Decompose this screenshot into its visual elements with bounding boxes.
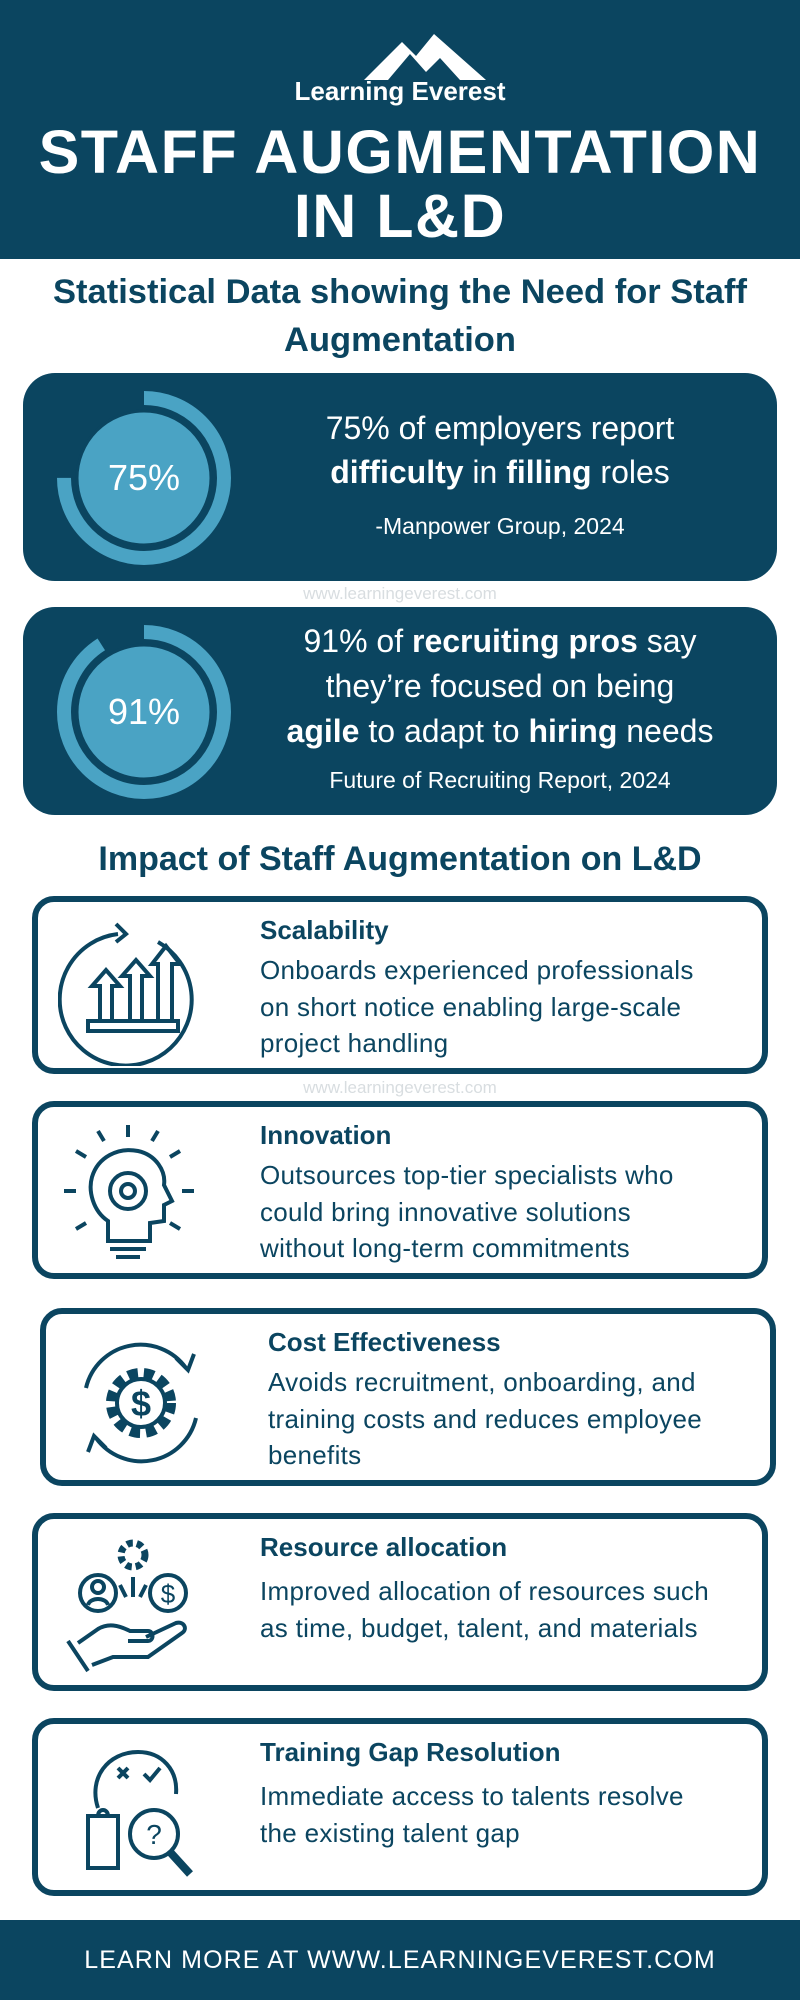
panel: innovation	[32, 1101, 768, 1279]
panel: training gap	[32, 1718, 768, 1896]
stat text: 91% of recruiting pros say	[303, 623, 696, 659]
panel: stat 91%	[23, 607, 777, 815]
text: training gap	[260, 1737, 684, 1848]
stat text: Future of Recruiting Report, 2024	[329, 767, 671, 793]
panel: scalability: Scalability	[260, 915, 389, 945]
icon: hand resources: $	[161, 1579, 176, 1609]
icon: puzzle head magnifier	[86, 1750, 193, 1877]
icon: lightbulb head	[64, 1125, 194, 1259]
heading: statistical data: Statistical Data showing the Need for Staff	[53, 273, 747, 311]
icon: growth arrows	[58, 922, 194, 1066]
stat text	[326, 410, 674, 539]
title: IN L&D	[294, 182, 506, 250]
logo text: Learning Everest	[294, 76, 505, 106]
panel: cost effectiveness: Cost Effectiveness	[268, 1327, 501, 1357]
panel: cost effectiveness: benefits	[268, 1440, 361, 1470]
panel: scalability: on short notice enabling large-scale	[260, 992, 681, 1022]
stat text: they’re focused on being	[326, 668, 674, 704]
panel: stat 75%	[23, 373, 777, 581]
panel: training gap: Immediate access to talents resolve	[260, 1781, 684, 1811]
heading: statistical data	[53, 273, 748, 359]
text: innovation	[260, 1120, 674, 1263]
stat text: -Manpower Group, 2024	[375, 513, 625, 539]
panel: innovation: could bring innovative solutions	[260, 1196, 631, 1226]
icon: gear dollar: $	[131, 1383, 151, 1424]
stat text: agile to adapt to hiring needs	[287, 713, 713, 749]
stat text	[287, 623, 713, 793]
icon: mountain logo	[364, 34, 486, 80]
icon: puzzle head magnifier: ?	[146, 1819, 162, 1850]
header	[0, 0, 800, 259]
chart: ring 91%: 91%	[108, 691, 180, 732]
panel: scalability: project handling	[260, 1028, 448, 1058]
panel: training gap: Training Gap Resolution	[260, 1737, 560, 1767]
panel: innovation: Innovation	[260, 1120, 391, 1150]
panel: scalability: Onboards experienced professionals	[260, 955, 694, 985]
heading: statistical data: Augmentation	[284, 321, 516, 359]
panel: training gap: the existing talent gap	[260, 1818, 520, 1848]
panel: resource allocation: Improved allocation of resources such	[260, 1576, 709, 1606]
chart: ring 75%	[57, 391, 231, 565]
panel: resource allocation: as time, budget, talent, and materials	[260, 1612, 698, 1642]
panel: innovation: Outsources top-tier specialists who	[260, 1160, 674, 1190]
text: scalability	[260, 915, 694, 1058]
watermark: www.learningeverest.com	[303, 584, 497, 603]
stat text: 75% of employers report	[326, 410, 674, 446]
panel: cost effectiveness: training costs and reduces employee	[268, 1404, 702, 1434]
panel: resource allocation: Resource allocation	[260, 1532, 507, 1562]
text: resource	[260, 1532, 709, 1642]
title	[39, 118, 761, 250]
panel: cost effectiveness: Avoids recruitment, onboarding, and	[268, 1367, 696, 1397]
panel: innovation: without long-term commitments	[260, 1233, 630, 1263]
watermark: www.learningeverest.com	[303, 1078, 497, 1097]
footer	[0, 1920, 800, 2000]
panel: scalability	[32, 896, 768, 1074]
icon: gear dollar	[84, 1342, 198, 1464]
chart: ring 75%: 75%	[108, 457, 180, 498]
icon: hand resources	[66, 1540, 188, 1672]
panel: cost effectiveness	[40, 1308, 776, 1486]
title: STAFF AUGMENTATION	[39, 118, 761, 186]
chart: ring 91%	[57, 625, 231, 799]
text: cost	[268, 1327, 702, 1470]
panel: resource allocation	[32, 1513, 768, 1691]
heading: impact: Impact of Staff Augmentation on L&D	[98, 840, 702, 878]
stat text: difficulty in filling roles	[330, 454, 670, 490]
footer: LEARN MORE AT WWW.LEARNINGEVEREST.COM	[84, 1946, 716, 1974]
